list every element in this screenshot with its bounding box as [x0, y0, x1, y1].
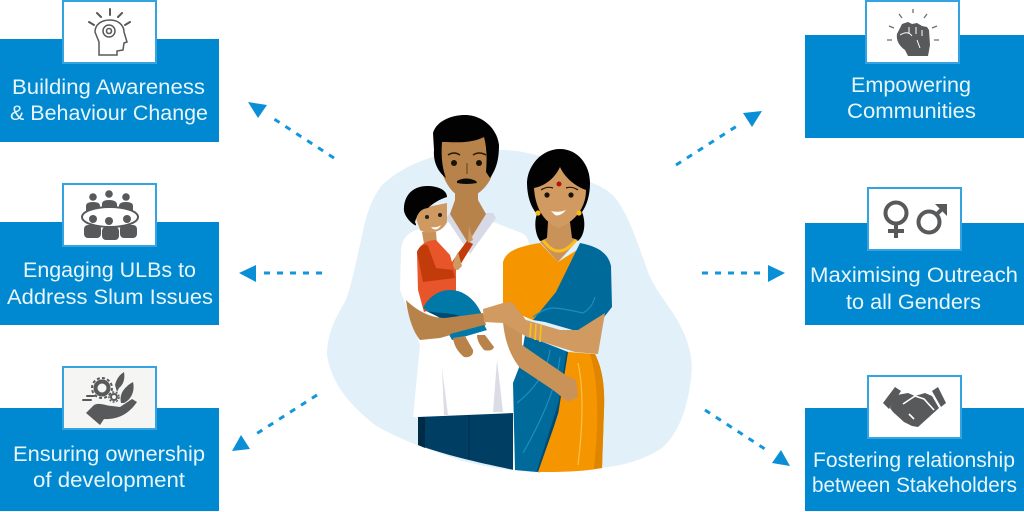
man: arm holding child — [406, 300, 486, 340]
arrow: to Building Awareness — [248, 102, 334, 158]
label — [10, 76, 208, 125]
man: shirt — [400, 222, 530, 417]
arrow: to Maximising Outreach — [702, 265, 785, 282]
man: trousers — [418, 413, 514, 470]
woman: neck and chest — [540, 222, 578, 262]
man: neck and collar — [446, 190, 496, 254]
label: Fostering relationship — [813, 449, 1015, 472]
child — [404, 186, 486, 340]
child: legs and feet below arm — [450, 325, 494, 357]
icon: meeting table — [82, 190, 138, 240]
woman: face — [534, 167, 586, 228]
label: of development — [33, 469, 185, 492]
panel: Fostering relationship — [805, 376, 1024, 511]
label: Maximising Outreach — [810, 264, 1018, 287]
woman: orange skirt — [538, 352, 604, 472]
icon: raised fist — [887, 9, 939, 56]
woman: blue saree drape — [533, 243, 612, 335]
arrow: to Ensuring ownership — [232, 395, 317, 451]
label — [812, 449, 1017, 497]
panel: Engaging ULBs — [0, 184, 219, 325]
label: Communities — [847, 100, 976, 123]
arrow: to Empowering Communities — [676, 111, 762, 165]
icon: gender symbols — [886, 202, 947, 238]
label: between Stakeholders — [812, 474, 1017, 497]
label — [810, 264, 1018, 314]
woman: lower blue saree — [513, 335, 568, 472]
label: Address Slum Issues — [7, 286, 213, 309]
icon: handshake — [883, 387, 946, 427]
man: head — [433, 115, 499, 197]
label: Ensuring ownership — [13, 443, 205, 466]
woman: arm resting on child — [483, 302, 605, 402]
woman: hair and braids — [527, 149, 590, 241]
label: to all Genders — [846, 291, 981, 314]
label — [7, 259, 213, 309]
label — [13, 443, 205, 492]
icon: head with target — [89, 9, 130, 55]
label: Building Awareness — [12, 76, 205, 99]
label: Engaging ULBs to — [23, 259, 196, 282]
panel: Ensuring ownership — [0, 367, 219, 511]
panel: Maximising Outreach — [805, 188, 1024, 325]
central blob background — [327, 150, 692, 472]
family illustration — [400, 115, 612, 472]
panel: Empowering Communities — [805, 1, 1024, 138]
arrow: to Engaging ULBs — [239, 265, 322, 282]
icon: hand with gears and leaves — [83, 372, 137, 425]
label: Empowering — [851, 74, 971, 97]
woman: necklace — [543, 240, 576, 251]
panel: Building Awareness — [0, 1, 219, 142]
label — [847, 74, 976, 123]
woman: orange blouse — [503, 243, 592, 320]
arrow: to Fostering relationship — [705, 410, 790, 466]
label: & Behaviour Change — [10, 102, 208, 125]
